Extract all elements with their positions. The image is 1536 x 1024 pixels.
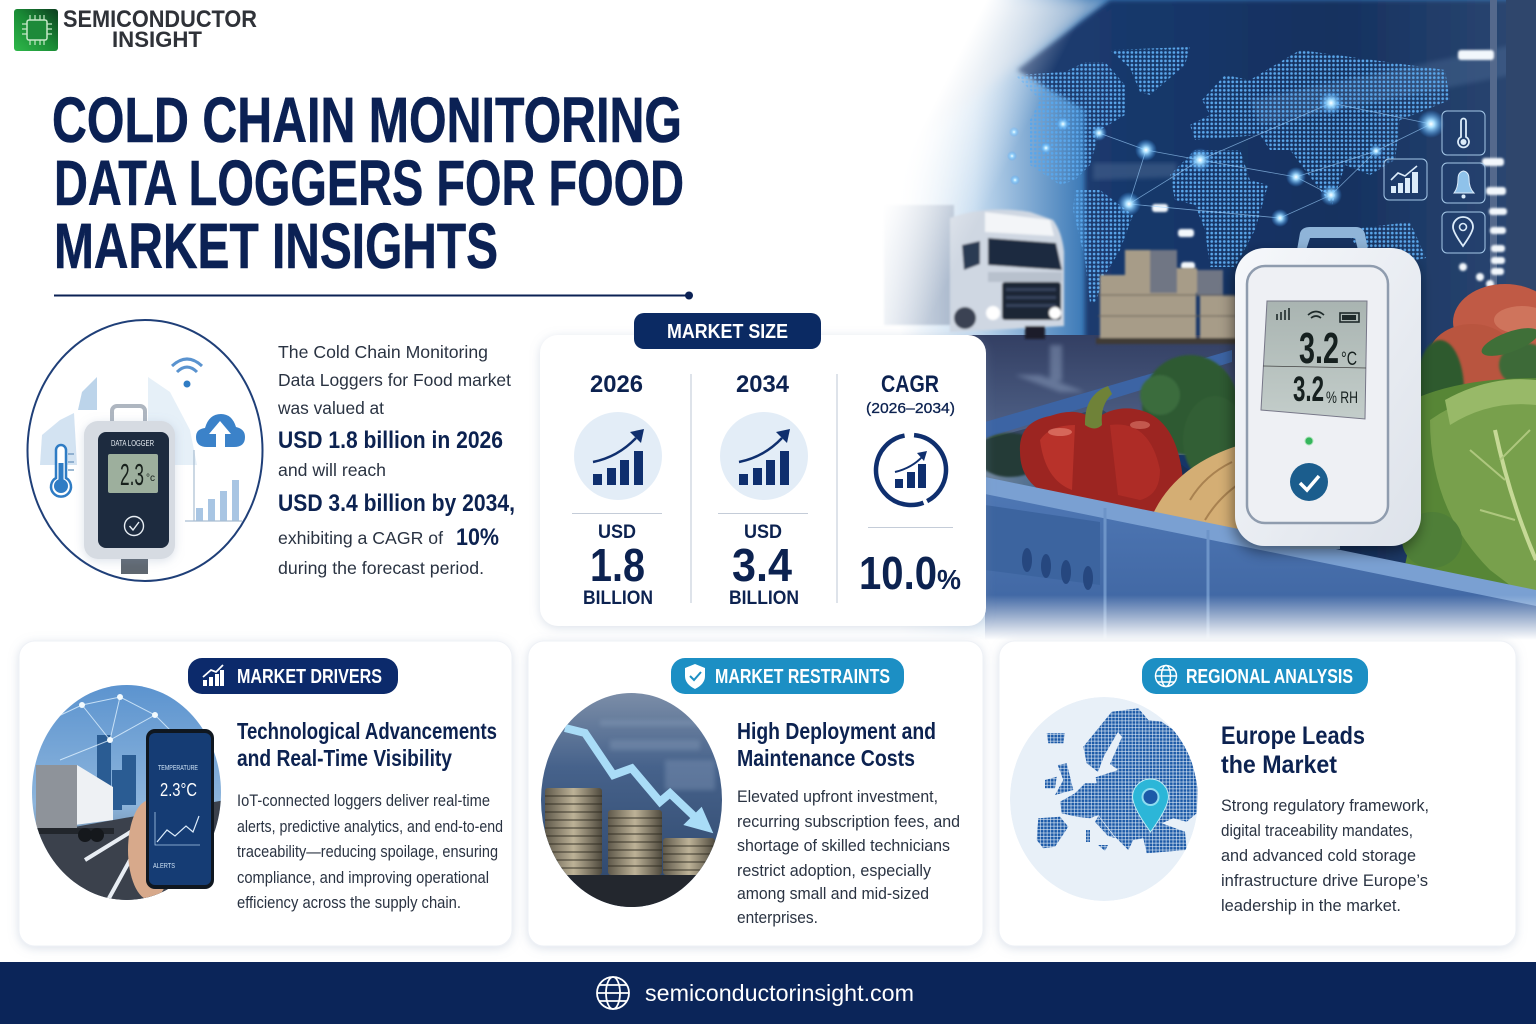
photo: coins and falling arrow bbox=[540, 692, 725, 911]
2034 column: 2034 bbox=[736, 371, 790, 398]
column dividers bbox=[691, 374, 837, 603]
network links bbox=[1099, 103, 1431, 218]
2034 column: USD bbox=[744, 522, 782, 543]
drivers body text: compliance, and improving operational bbox=[237, 869, 489, 887]
restraints body text bbox=[737, 788, 960, 927]
smartphone bbox=[146, 729, 214, 889]
drivers body text: efficiency across the supply chain. bbox=[237, 894, 461, 912]
panel: regional analysis: Europe Leads bbox=[1221, 722, 1365, 750]
restraints pill: MARKET RESTRAINTS bbox=[715, 666, 890, 688]
icon: location pin tile bbox=[1442, 212, 1485, 253]
intro text block: during the forecast period. bbox=[278, 558, 484, 578]
icon: bell tile bbox=[1442, 163, 1485, 203]
logo: INSIGHT bbox=[112, 27, 203, 52]
crate interior shadow bbox=[986, 410, 1188, 488]
icon: thermometer tile bbox=[1442, 111, 1485, 155]
device screen: 3.2 bbox=[1293, 370, 1324, 409]
title bbox=[52, 84, 684, 282]
2026 column: USD bbox=[598, 522, 636, 543]
icon: wifi bbox=[172, 359, 202, 388]
device screen: 3.2 bbox=[1299, 324, 1339, 373]
regional body text: infrastructure drive Europe’s bbox=[1221, 872, 1428, 890]
panel: market size bbox=[540, 313, 986, 626]
data logger device bbox=[1235, 227, 1421, 549]
CAGR column: 10.0 bbox=[859, 547, 937, 599]
icon: chart tile bbox=[1384, 159, 1427, 200]
2026 column: 1.8 bbox=[590, 539, 645, 591]
device: 2.3 bbox=[120, 457, 144, 492]
panel: regional analysis: the Market bbox=[1221, 751, 1338, 779]
device handle bbox=[1297, 227, 1368, 250]
red bell pepper bbox=[1020, 386, 1183, 516]
intro text block: 10% bbox=[456, 524, 499, 551]
CAGR column bbox=[859, 371, 961, 599]
smartphone: ALERTS bbox=[153, 861, 175, 870]
restraints body text: enterprises. bbox=[737, 909, 818, 927]
2026 column: BILLION bbox=[583, 588, 653, 609]
regional body text: Strong regulatory framework, bbox=[1221, 797, 1429, 815]
regional pill: REGIONAL ANALYSIS bbox=[1186, 666, 1353, 688]
regional pill bbox=[1142, 658, 1368, 694]
regional body text: digital traceability mandates, bbox=[1221, 822, 1413, 840]
panel: market drivers: and Real-Time Visibility bbox=[237, 745, 452, 771]
hero photo: cold chain warehouse with data logger bbox=[860, 0, 1536, 640]
2034 column: 3.4 bbox=[732, 539, 792, 591]
2026 column bbox=[572, 371, 662, 609]
2034 column bbox=[718, 371, 808, 609]
intro text block: USD 3.4 billion by 2034, bbox=[278, 490, 515, 517]
check button bbox=[1290, 463, 1328, 501]
intro text block bbox=[277, 342, 515, 578]
2034 column: BILLION bbox=[729, 588, 799, 609]
drivers body text: alerts, predictive analytics, and end-to-end bbox=[237, 818, 503, 836]
drivers pill bbox=[188, 658, 398, 694]
restraints body text: restrict adoption, especially bbox=[737, 862, 932, 880]
restraints pill bbox=[671, 658, 904, 694]
intro text block: and will reach bbox=[278, 460, 386, 480]
icon: bar chart bbox=[185, 450, 242, 521]
device: DATA LOGGER bbox=[111, 439, 154, 448]
regional body text: and advanced cold storage bbox=[1221, 847, 1416, 865]
panel: market restraints: Maintenance Costs bbox=[737, 745, 915, 771]
device bbox=[84, 406, 175, 574]
intro text block: The Cold Chain Monitoring bbox=[278, 342, 488, 362]
status led bbox=[1305, 437, 1313, 445]
panel: regional analysis bbox=[999, 641, 1516, 946]
restraints body text: recurring subscription fees, and bbox=[737, 813, 960, 831]
crate back rim bbox=[985, 350, 1232, 438]
restraints body text: shortage of skilled technicians bbox=[737, 837, 950, 855]
logo: SEMICONDUCTOR bbox=[63, 6, 257, 33]
drivers body text: IoT-connected loggers deliver real-time bbox=[237, 792, 490, 810]
photo: truck and smartphone bbox=[30, 683, 225, 905]
faded buildings bbox=[40, 377, 197, 465]
footer bar bbox=[0, 962, 1536, 1024]
2026 column: 2026 bbox=[590, 371, 643, 398]
restraints body text: Elevated upfront investment, bbox=[737, 788, 938, 806]
title rule bbox=[54, 292, 693, 300]
title: DATA LOGGERS FOR FOOD bbox=[54, 147, 684, 219]
smartphone: 2.3°C bbox=[160, 780, 197, 800]
icon: location pin bbox=[1132, 779, 1168, 832]
market size pill bbox=[634, 313, 821, 349]
device screen bbox=[1261, 301, 1367, 419]
intro text block: Data Loggers for Food market bbox=[278, 370, 511, 390]
smartphone: TEMPERATURE bbox=[158, 763, 198, 772]
illustration: data logger medallion bbox=[28, 320, 262, 581]
lettuce bbox=[1402, 322, 1536, 610]
dotted world map bbox=[1015, 47, 1450, 303]
map: Europe bbox=[1010, 697, 1198, 901]
panel: market drivers: Technological Advancements bbox=[237, 718, 497, 744]
intro text block: was valued at bbox=[277, 398, 384, 418]
leafy greens behind bbox=[976, 340, 1536, 484]
CAGR column: (2026–2034) bbox=[866, 400, 955, 417]
regional body text bbox=[1221, 797, 1429, 915]
icon: thermometer bbox=[51, 445, 74, 497]
logo bbox=[14, 6, 257, 52]
panel: market drivers bbox=[19, 641, 512, 946]
hero fade overlays bbox=[860, 0, 1536, 640]
regional body text: leadership in the market. bbox=[1221, 897, 1401, 915]
drivers body text: traceability—reducing spoilage, ensuring bbox=[237, 843, 498, 861]
CAGR column: CAGR bbox=[881, 371, 939, 398]
CAGR column: % bbox=[937, 564, 961, 595]
device: °c bbox=[146, 473, 155, 484]
device screen: % RH bbox=[1326, 388, 1358, 407]
panel: market restraints: High Deployment and bbox=[737, 718, 936, 744]
intro text block: USD 1.8 billion in 2026 bbox=[278, 427, 503, 454]
panel: market restraints bbox=[528, 641, 983, 946]
device screen: °C bbox=[1341, 349, 1357, 370]
truck bbox=[884, 205, 1064, 339]
road bbox=[968, 335, 1235, 455]
restraints body text: among small and mid-sized bbox=[737, 885, 929, 903]
intro text block: exhibiting a CAGR of bbox=[278, 528, 443, 548]
device body bbox=[1235, 248, 1421, 546]
icon: globe bbox=[597, 977, 629, 1009]
footer bar: semiconductorinsight.com bbox=[645, 980, 914, 1006]
warehouse background bbox=[860, 0, 1536, 640]
drivers pill: MARKET DRIVERS bbox=[237, 666, 382, 688]
tomatoes bbox=[1428, 284, 1536, 392]
squash bbox=[1154, 446, 1238, 529]
network nodes bbox=[1007, 91, 1445, 227]
icon: cloud upload bbox=[196, 414, 245, 451]
logo chip icon bbox=[14, 9, 58, 51]
pallets of boxes bbox=[1096, 250, 1238, 344]
title: COLD CHAIN MONITORING bbox=[52, 84, 682, 156]
drivers body text bbox=[237, 792, 503, 912]
title: MARKET INSIGHTS bbox=[54, 210, 498, 282]
market size pill: MARKET SIZE bbox=[667, 321, 788, 343]
crate front wall bbox=[985, 477, 1536, 640]
